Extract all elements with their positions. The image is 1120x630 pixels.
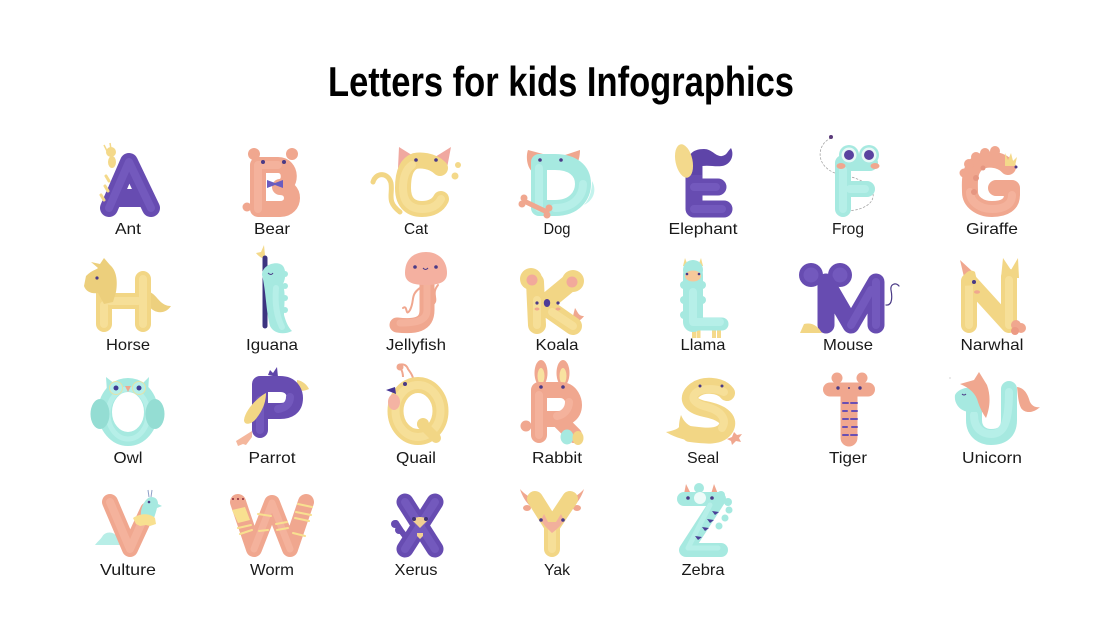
letter B: Bear [242,148,298,238]
label: Worm [250,562,294,579]
label: Koala [536,337,579,354]
icon: zebra letter Z [684,483,732,550]
letter A: Ant [101,143,151,238]
icon: yak letter Y [520,489,584,549]
icon: tiger letter T [830,372,868,438]
icon: mouse letter M [799,263,899,333]
label: Seal [687,450,719,467]
letter Q: Quail [386,364,440,467]
letter L: Llama [680,258,726,354]
letter P: Parrot [236,367,309,467]
label: Owl [114,450,142,467]
letter S: Seal [666,384,742,467]
icon: jellyfish letter J [397,252,447,326]
icon: owl letter O [90,377,164,439]
icon: iguana letter I [256,245,292,333]
title: Letters for kids Infographics [328,58,794,105]
label: Bear [254,221,291,238]
label: Quail [396,450,436,467]
icon: horse letter H [84,258,171,324]
label: Parrot [248,450,296,467]
icon: ant letter A [101,143,151,208]
label: Unicorn [962,450,1022,467]
label: Narwhal [960,337,1024,354]
letter J: Jellyfish [386,252,447,354]
label: Llama [680,337,726,354]
label: Rabbit [532,450,583,467]
letter H: Horse [84,258,171,354]
label: Iguana [246,337,298,354]
label: Zebra [682,562,725,579]
label: Horse [106,337,150,354]
letter E: Elephant [668,143,738,238]
letter O: Owl [90,377,164,467]
icon: narwhal letter N [960,258,1026,335]
label: Frog [832,221,864,238]
letter U: Unicorn [949,372,1040,467]
letter X: Xerus [391,502,438,579]
icon: cat letter C [373,147,461,212]
icon: parrot letter P [236,367,309,446]
label: Yak [544,562,571,579]
letter T: Tiger [829,372,868,467]
icon: koala letter K [520,268,584,326]
icon: unicorn letter U [949,372,1040,437]
icon: elephant letter E [672,143,732,209]
label: Cat [404,221,429,238]
label: Ant [115,221,142,238]
icon: bear letter B [242,148,298,212]
icon: rabbit letter R [520,360,584,445]
letter I: Iguana [246,245,298,354]
letter R: Rabbit [520,360,584,467]
letter V: Vulture [95,490,162,579]
letter Y: Yak [520,489,584,579]
icon: dog letter D [518,150,594,218]
label: Dog [544,221,570,238]
label: Vulture [100,562,156,579]
icon: xerus letter X [391,502,435,549]
letter K: Koala [520,268,584,354]
icon: worm letter W [232,498,312,549]
label: Elephant [668,221,738,238]
label: Giraffe [966,221,1018,238]
letter W: Worm [232,498,312,579]
label: Tiger [829,450,868,467]
letter Z: Zebra [682,483,732,579]
letter G: Giraffe [960,146,1018,238]
letter D: Dog [518,150,594,238]
icon: seal letter S [666,384,742,445]
icon: llama letter L [680,258,722,338]
letter F: Frog [820,135,880,238]
icon: giraffe letter G [960,146,1018,209]
icon: frog letter F [820,135,880,210]
label: Mouse [823,337,873,354]
icon: quail letter Q [386,364,440,438]
letter N: Narwhal [960,258,1026,354]
letter M: Mouse [799,263,899,354]
icon: vulture letter V [95,490,162,549]
letter C: Cat [373,147,461,238]
label: Jellyfish [386,337,446,354]
label: Xerus [394,562,438,579]
